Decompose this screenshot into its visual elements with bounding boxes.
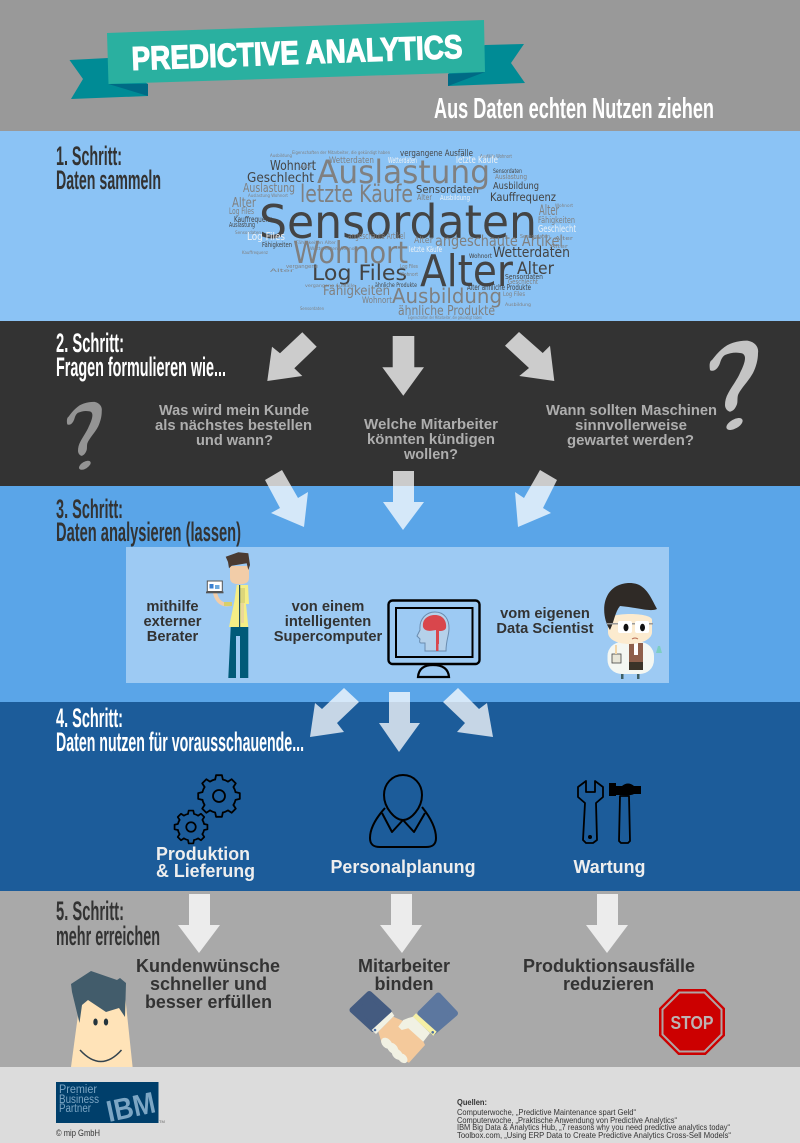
label: production: & Lieferung bbox=[156, 860, 255, 881]
arrow: to retention bbox=[380, 894, 422, 953]
sources: Toolbox.com, „Using ERP Data to Create Predictive Analytics Cross-Sell Models“ bbox=[457, 1130, 731, 1140]
illustration: data scientist bbox=[604, 583, 662, 679]
word cloud: letzte Käufe bbox=[456, 155, 498, 166]
icon: monitor with brain bbox=[388, 600, 480, 677]
text: external consultants: mithilfe bbox=[146, 599, 199, 615]
text: external consultants: Berater bbox=[147, 629, 199, 645]
word cloud: Alter bbox=[550, 244, 569, 250]
text: customer question: Was wird mein Kunde bbox=[159, 402, 309, 419]
arrow: to production bbox=[310, 688, 359, 737]
panel: footer bbox=[0, 1067, 800, 1143]
title: PREDICTIVE ANALYTICS bbox=[131, 28, 463, 77]
word cloud: Wohnort bbox=[469, 252, 492, 260]
banner ribbon bbox=[70, 20, 525, 99]
word cloud bbox=[229, 149, 576, 320]
text: employee question: Welche Mitarbeiter bbox=[364, 416, 498, 433]
word cloud: Alter bbox=[517, 259, 554, 279]
text: supercomputer bbox=[274, 599, 383, 645]
word cloud: Ausbildung bbox=[270, 153, 292, 159]
word cloud: Wohnort bbox=[555, 203, 573, 209]
word cloud: Sensordaten bbox=[416, 183, 479, 196]
word cloud: Fähigkeiten bbox=[262, 241, 292, 249]
text: data scientist: Data Scientist bbox=[496, 621, 594, 637]
word cloud: Wetterdaten bbox=[329, 156, 374, 166]
word cloud: ähnliche Produkte bbox=[375, 281, 417, 289]
heading: step 5: mehr erreichen bbox=[56, 921, 160, 951]
text: employee question bbox=[364, 416, 498, 463]
word cloud: letzte Käufe bbox=[300, 180, 413, 208]
logo: IBM premier business partner: TM bbox=[159, 1119, 165, 1124]
icon: large question mark bbox=[710, 341, 758, 432]
icon: person bbox=[370, 775, 436, 847]
word cloud: Auslastung bbox=[229, 221, 255, 229]
word cloud: vergangene bbox=[286, 264, 318, 270]
heading: step 1: Daten sammeln bbox=[56, 165, 161, 195]
word cloud: Geschlecht bbox=[508, 278, 538, 286]
text: employee retention: binden bbox=[374, 974, 434, 994]
heading: step 2: 2. Schritt: bbox=[56, 328, 124, 358]
word cloud: Alter bbox=[555, 236, 574, 242]
icon: wrench and hammer bbox=[578, 781, 641, 843]
arrow: from employee question bbox=[383, 471, 424, 530]
text: reduce production failures bbox=[523, 956, 695, 994]
heading: step 3: 3. Schritt: bbox=[56, 494, 123, 524]
text: reduce production failures: Produktionsausfälle bbox=[523, 956, 695, 976]
label: maintenance: Wartung bbox=[574, 856, 646, 877]
heading: step 4: Daten nutzen für vorausschauende... bbox=[56, 727, 304, 757]
word cloud: vergangene Ausfälle bbox=[305, 283, 355, 289]
text: supercomputer: Supercomputer bbox=[274, 629, 383, 645]
arrow: down bbox=[382, 336, 424, 396]
text: employee question: könnten kündigen bbox=[367, 431, 495, 448]
word cloud: Kauffrequenz bbox=[234, 215, 272, 224]
heading: step 3: Daten analysieren (lassen) bbox=[56, 517, 241, 547]
word cloud: Alter ähnliche Produkte bbox=[467, 283, 531, 292]
icon: small question mark bbox=[67, 402, 102, 472]
word cloud: Auslastung bbox=[317, 153, 490, 191]
icon: gears bbox=[174, 775, 240, 844]
word cloud: Kauffrequenz bbox=[242, 250, 269, 256]
arrow: down left bbox=[267, 332, 317, 381]
text: external consultants bbox=[144, 599, 202, 645]
word cloud: Auslastung Wohnort bbox=[248, 193, 288, 199]
word cloud: angeschaute Artikel bbox=[435, 232, 563, 250]
panel: step 4 use data bbox=[0, 688, 800, 891]
text: customer wishes: schneller und bbox=[150, 974, 267, 994]
word cloud: Wetterdaten bbox=[388, 156, 417, 165]
word cloud: Eigenschaften der Mitarbeiter, die gekündigt haben bbox=[408, 315, 482, 320]
word cloud: Fähigkeiten bbox=[323, 284, 390, 299]
word cloud: Alter bbox=[417, 193, 433, 202]
text: customer question bbox=[155, 402, 312, 449]
text: machine question: sinnvollerweise bbox=[575, 417, 687, 434]
word cloud: Alter bbox=[539, 203, 559, 219]
heading: step 2: Fragen formulieren wie... bbox=[56, 352, 226, 382]
text: customer wishes bbox=[136, 956, 280, 1012]
word cloud: Sensordaten bbox=[259, 195, 537, 249]
panel: step 2 ask questions bbox=[0, 321, 800, 486]
word cloud: Alter bbox=[414, 236, 433, 246]
sources: Computerwoche, „Praktische Anwendung von Predictive Analytics“ bbox=[457, 1115, 677, 1125]
sources bbox=[457, 1097, 731, 1140]
word cloud: angeschaute Artikel bbox=[348, 232, 405, 242]
heading: step 5 bbox=[56, 896, 160, 951]
word cloud: Wohnort bbox=[362, 296, 393, 306]
arrow: from machine question bbox=[515, 470, 557, 527]
text: customer question: als nächstes bestellen bbox=[155, 417, 312, 434]
word cloud: Wetterdaten Wohnort bbox=[310, 246, 358, 252]
heading: step 4: 4. Schritt: bbox=[56, 703, 123, 733]
word cloud: Log Files bbox=[503, 291, 525, 298]
word cloud: Wohnort bbox=[400, 272, 418, 278]
word cloud: Alter bbox=[232, 196, 257, 211]
text: data scientist bbox=[496, 606, 594, 637]
word cloud: Ausbildung bbox=[505, 302, 531, 308]
word cloud: Wetterdaten bbox=[493, 245, 570, 261]
text: employee retention: Mitarbeiter bbox=[358, 956, 450, 976]
text: supercomputer: intelligenten bbox=[285, 614, 371, 630]
text: machine question: Wann sollten Maschinen bbox=[546, 402, 717, 419]
illustration: smiling customer bbox=[71, 971, 133, 1067]
logo: IBM premier business partner: Business bbox=[59, 1094, 99, 1106]
text: customer wishes: Kundenwünsche bbox=[136, 956, 280, 976]
sources: IBM Big Data & Analytics Hub, „7 reasons why you need predictive analytics today“ bbox=[457, 1122, 730, 1132]
word cloud: Auslastung bbox=[243, 181, 295, 195]
word cloud: Sensordaten bbox=[235, 230, 261, 236]
word cloud: letzte Käufe bbox=[409, 245, 442, 254]
word cloud: Geschlecht bbox=[538, 224, 576, 235]
logo: IBM premier business partner: Partner bbox=[59, 1103, 91, 1115]
panel: header bbox=[0, 0, 800, 131]
heading: step 2 bbox=[56, 328, 226, 382]
label: production bbox=[156, 843, 255, 881]
arrow: to reduced failures bbox=[586, 894, 628, 953]
word cloud: Eigenschaften der Mitarbeiter, die gekündigt haben bbox=[292, 150, 390, 155]
word cloud: Log Files bbox=[247, 230, 285, 243]
panel: step 5 achieve more bbox=[0, 891, 800, 1067]
text: supercomputer: von einem bbox=[292, 599, 364, 615]
word cloud: Geschlecht bbox=[247, 170, 314, 186]
heading: step 4 bbox=[56, 703, 304, 757]
icon: stop sign: STOP bbox=[670, 1013, 714, 1033]
logo: IBM premier business partner bbox=[56, 1082, 165, 1129]
label: production: Produktion bbox=[156, 843, 250, 864]
word cloud: Log Files bbox=[229, 207, 254, 217]
word cloud: Ausbildung bbox=[493, 181, 539, 192]
icon: stop sign bbox=[659, 989, 725, 1055]
panel: step 1 collect data bbox=[0, 131, 800, 321]
text: employee retention bbox=[358, 956, 450, 994]
heading: step 3 bbox=[56, 494, 241, 547]
text: employee question: wollen? bbox=[403, 446, 458, 463]
word cloud: Log Files bbox=[400, 264, 418, 270]
text: machine question: gewartet werden? bbox=[567, 432, 694, 449]
arrow: to staffing bbox=[379, 692, 420, 752]
word cloud: Sensordaten bbox=[300, 306, 324, 312]
copyright: © mip GmbH bbox=[56, 1128, 100, 1138]
word cloud: Sensordaten bbox=[505, 273, 543, 281]
word cloud: Ausfälle Wohnort bbox=[480, 154, 512, 160]
word cloud: Sensordaten bbox=[520, 234, 550, 240]
label: staffing: Personalplanung bbox=[330, 856, 476, 877]
text: reduce production failures: reduzieren bbox=[563, 974, 654, 994]
word cloud: Ausbildung bbox=[392, 284, 502, 308]
text: external consultants: externer bbox=[144, 614, 202, 630]
word cloud: Kauffrequenz bbox=[490, 190, 556, 204]
panel: analysis options bbox=[126, 547, 669, 683]
logo: IBM premier business partner: Premier bbox=[59, 1084, 97, 1096]
sources: Quellen: bbox=[457, 1097, 487, 1107]
illustration: consultant bbox=[206, 552, 250, 678]
panel: step 3 analyse data bbox=[0, 470, 800, 702]
word cloud: Alter bbox=[420, 246, 514, 297]
word cloud: Fähigkeiten Alter bbox=[296, 240, 336, 246]
text: machine question bbox=[546, 402, 717, 449]
word cloud: Fähigkeiten bbox=[538, 216, 575, 226]
word cloud: ähnliche Produkte bbox=[398, 304, 495, 319]
heading: step 1: 1. Schritt: bbox=[56, 141, 122, 171]
heading: step 5: 5. Schritt: bbox=[56, 896, 124, 926]
word cloud: Wohnort bbox=[270, 159, 316, 174]
word cloud: Wohnort bbox=[293, 236, 408, 271]
text: customer question: und wann? bbox=[196, 432, 273, 449]
word cloud: Alter bbox=[270, 268, 294, 274]
text: customer wishes: besser erfüllen bbox=[145, 992, 272, 1012]
word cloud: Log Files bbox=[312, 261, 407, 285]
heading: step 1 bbox=[56, 141, 161, 195]
arrow: from customer question bbox=[265, 470, 308, 527]
illustration: handshake bbox=[352, 994, 455, 1065]
text: data scientist: vom eigenen bbox=[500, 606, 590, 622]
arrow: down right bbox=[505, 332, 554, 381]
arrow: to customer wishes bbox=[178, 894, 220, 953]
word cloud: Sensordaten bbox=[493, 168, 522, 175]
logo: IBM premier business partner: IBM bbox=[104, 1086, 158, 1129]
word cloud: Alter bbox=[300, 164, 314, 170]
word cloud: Ausbildung bbox=[440, 194, 470, 202]
sources: Computerwoche, „Predictive Maintenance spart Geld“ bbox=[457, 1107, 636, 1117]
word cloud: vergangene Ausfälle bbox=[400, 149, 473, 159]
word cloud: Auslastung bbox=[495, 173, 527, 181]
arrow: to maintenance bbox=[443, 688, 493, 737]
